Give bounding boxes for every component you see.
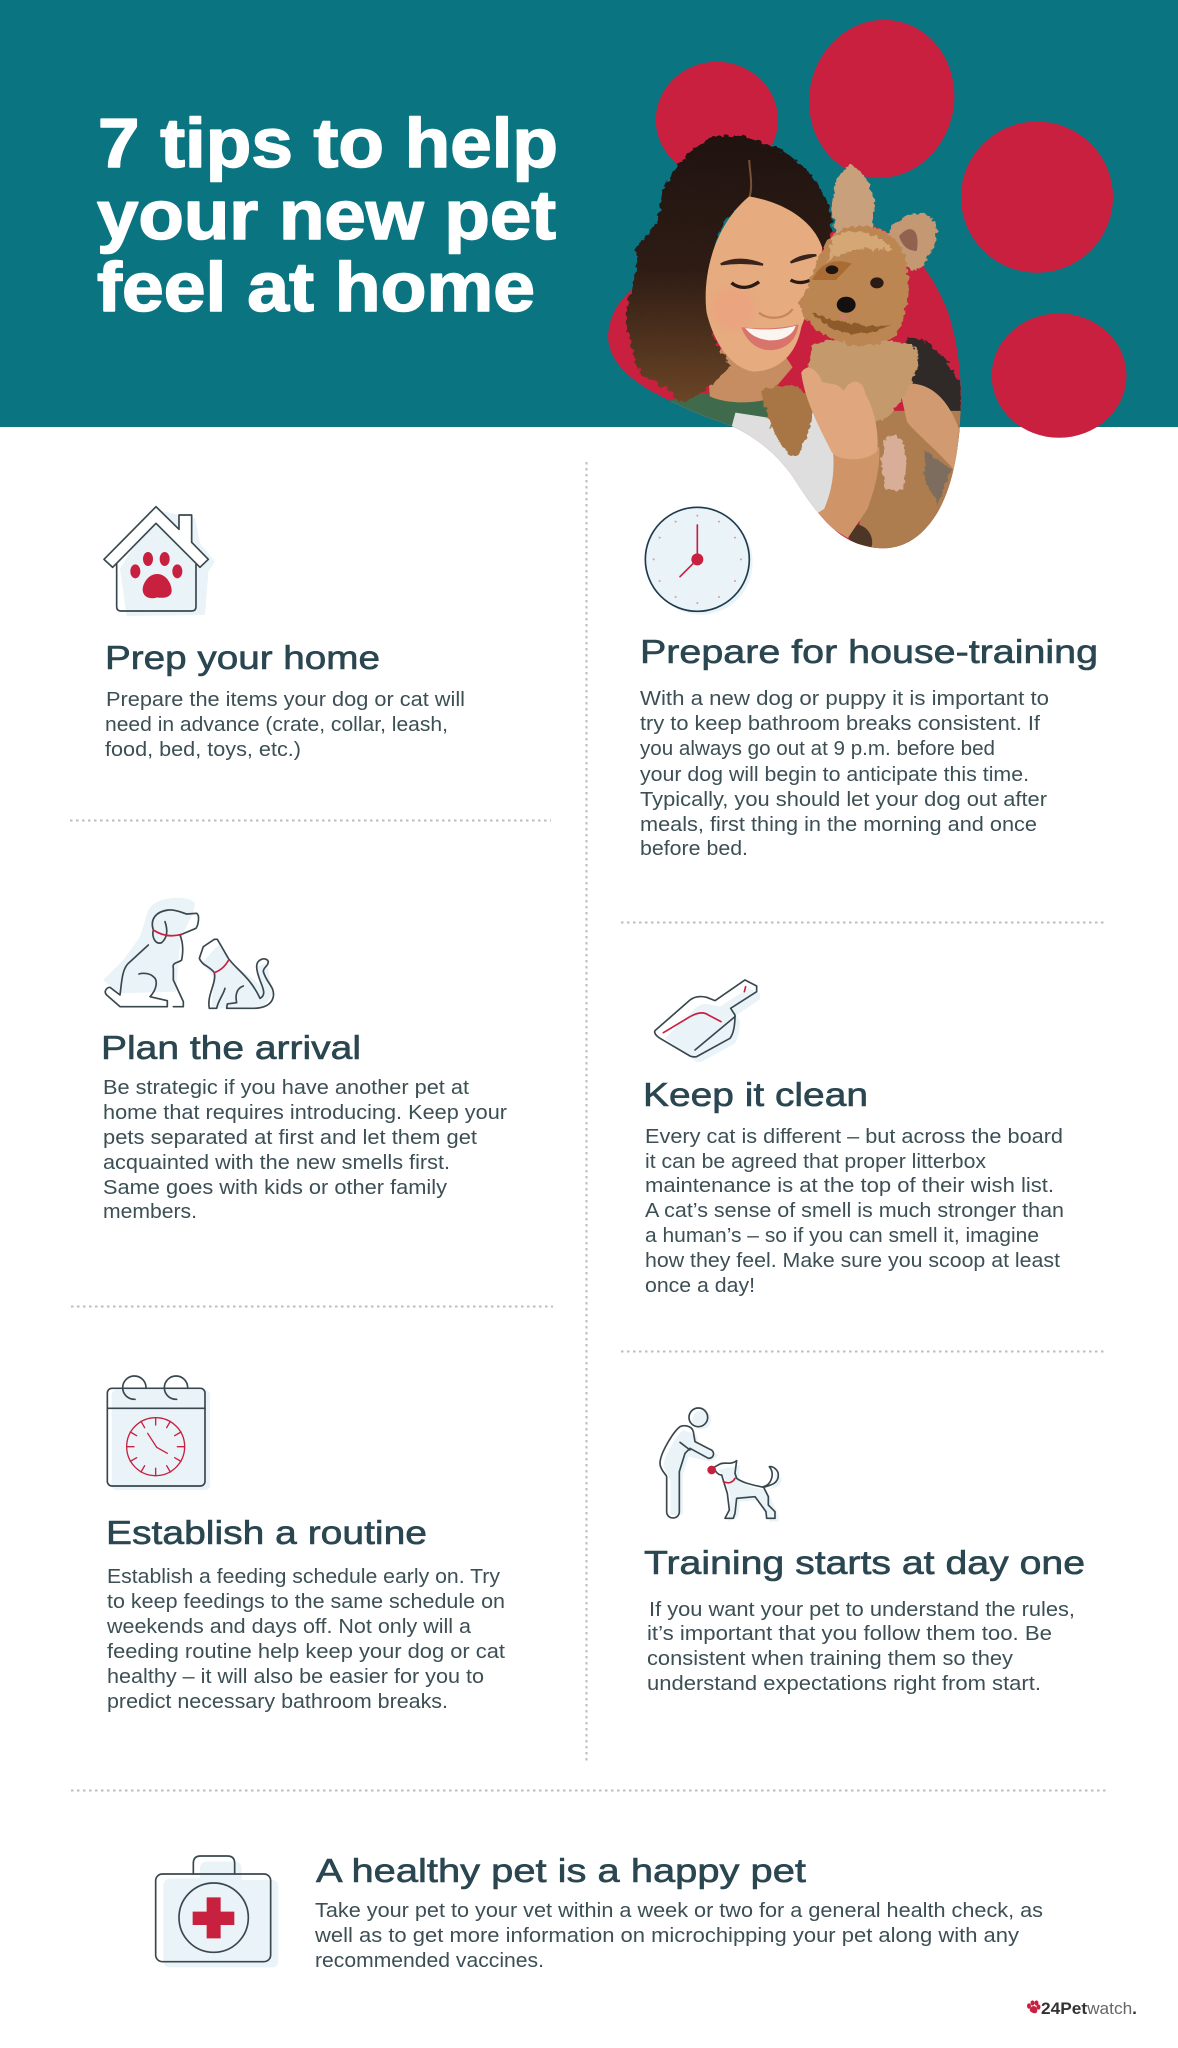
text block: feeding routine help keep your dog or cat [107, 1641, 505, 1663]
heading: Keep it clean [643, 1076, 868, 1113]
face [706, 196, 822, 372]
text block: meals, first thing in the morning and once [640, 814, 1037, 836]
shirt [672, 402, 834, 520]
text block: A cat’s sense of smell is much stronger than [645, 1200, 1064, 1222]
dog face [826, 265, 838, 274]
text block: healthy – it will also be easier for you to [107, 1666, 484, 1688]
text block: acquainted with the new smells first. [103, 1152, 450, 1174]
text block: try to keep bathroom breaks consistent. If [640, 713, 1040, 735]
text block: how they feel. Make sure you scoop at least [645, 1250, 1060, 1272]
text block: If you want your pet to understand the rules, [649, 1599, 1075, 1621]
icon: small paw [1027, 2000, 1040, 2013]
text block: Same goes with kids or other family [103, 1177, 447, 1199]
text block: members. [103, 1201, 197, 1223]
text block: it’s important that you follow them too. Be [647, 1623, 1052, 1645]
heading: A healthy pet is a happy pet [316, 1852, 806, 1889]
text block: your dog will begin to anticipate this time. [640, 764, 1029, 786]
dog ears [833, 164, 875, 240]
heading: Prep your home [105, 639, 380, 676]
heading: Training starts at day one [644, 1544, 1085, 1581]
text block: Prepare the items your dog or cat will [106, 689, 465, 711]
icon: wall clock [645, 507, 753, 615]
center vertical divider [586, 462, 588, 1763]
panel: prepare for house-training [640, 507, 1098, 860]
paw graphic with photo of woman and dog [608, 13, 1126, 553]
title: feel at home [97, 248, 535, 326]
hair [626, 135, 832, 403]
heading: Plan the arrival [101, 1029, 361, 1066]
text block [314, 1900, 1043, 1972]
neck [707, 349, 793, 402]
text block: you always go out at 9 p.m. before bed [640, 738, 995, 760]
title: your new pet [97, 176, 556, 254]
icon: litter scoop [655, 980, 760, 1062]
text block: weekends and days off. Not only will a [106, 1616, 472, 1638]
text block: Be strategic if you have another pet at [103, 1077, 469, 1099]
logo: 24Petwatch: 24Petwatch. [1041, 1999, 1137, 2018]
text block: pets separated at first and let them get [103, 1127, 477, 1149]
text block: understand expectations right from start. [647, 1673, 1041, 1695]
panel: plan the arrival [101, 898, 507, 1223]
panel: prep your home [104, 507, 465, 761]
dog lower body and legs [860, 411, 966, 553]
text block [645, 1126, 1064, 1297]
icon: dog and cat [103, 898, 274, 1008]
text block: maintenance is at the top of their wish list. [645, 1175, 1054, 1197]
text block: recommended vaccines. [315, 1950, 544, 1972]
heading: Establish a routine [106, 1514, 427, 1551]
text block: Typically, you should let your dog out after [640, 789, 1047, 811]
dog chest and paw [804, 338, 918, 421]
icon: first aid kit [156, 1856, 278, 1967]
text block [640, 688, 1049, 860]
text block [106, 1566, 505, 1713]
text block: once a day! [645, 1275, 755, 1297]
panel: training starts at day one [644, 1408, 1085, 1695]
text block: consistent when training them so they [647, 1648, 1013, 1670]
title [97, 104, 558, 326]
icon: calendar with clock [107, 1376, 210, 1490]
paw toes and pad [608, 13, 1126, 548]
icon: person training dog [660, 1408, 782, 1522]
dog head [800, 226, 909, 345]
text block: a human’s – so if you can smell it, imagine [645, 1225, 1039, 1247]
panel: keep it clean [643, 980, 1064, 1297]
title: 7 tips to help [98, 104, 558, 182]
panel: establish a routine [106, 1376, 505, 1713]
text block: well as to get more information on microchipping your pet along with any [314, 1925, 1019, 1947]
text block: it can be agreed that proper litterbox [645, 1151, 986, 1173]
text block [105, 689, 465, 761]
panel: a healthy pet is a happy pet [156, 1852, 1043, 1972]
text block: Every cat is different – but across the board [645, 1126, 1063, 1148]
text block: food, bed, toys, etc.) [105, 739, 301, 761]
text block [103, 1077, 507, 1223]
heading: Prepare for house-training [640, 633, 1098, 670]
header band [0, 0, 1178, 427]
woman's hand [801, 368, 878, 459]
dog dark back [907, 338, 961, 433]
text block: to keep feedings to the same schedule on [107, 1591, 505, 1613]
text block: predict necessary bathroom breaks. [107, 1691, 448, 1713]
text block: Take your pet to your vet within a week or two for a general health check, as [315, 1900, 1043, 1922]
text block: With a new dog or puppy it is important to [640, 688, 1049, 710]
text block: home that requires introducing. Keep your [103, 1102, 507, 1124]
icon: house with paw [104, 507, 215, 616]
woman's arms [818, 447, 880, 538]
text block [647, 1599, 1075, 1695]
text block: Establish a feeding schedule early on. Try [107, 1566, 500, 1588]
photo: woman holding dog [626, 135, 966, 553]
text block: before bed. [640, 838, 748, 860]
text block: need in advance (crate, collar, leash, [105, 714, 448, 736]
